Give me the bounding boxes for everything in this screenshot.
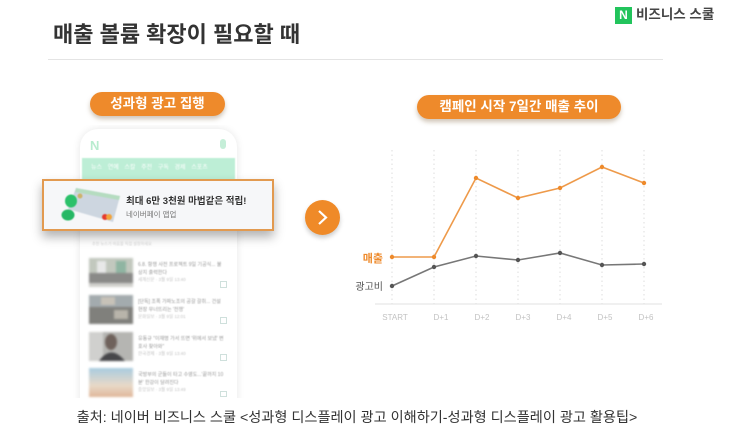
axis labels: START [382,313,408,322]
news item 3: 유동규 "이재명 가서 뜨면 '위에서 보냈' 변호사 찾아와" [138,336,224,350]
series: revenue [390,165,646,259]
axis labels: D+1 [434,313,449,322]
phone sub text: 추천 뉴스가 마음을 직접 설정하세요 [92,241,152,246]
icon: arrow circle [305,200,340,235]
microphone icon [220,139,226,149]
phone nav bar: 뉴스 연예 스칼 주전 구독 경제 스포츠 [91,165,208,171]
news list: 한국경제 · 3월 9일 13:40 [138,351,186,356]
axis labels: D+4 [557,313,572,322]
thumbnail 1 [88,257,134,288]
left heading pill: 성과형 광고 집행 [110,96,205,111]
axis labels: D+6 [639,313,654,322]
axis labels: D+5 [598,313,613,322]
title: 매출 볼륨 확장이 필요할 때 [53,22,300,47]
axis labels: D+2 [475,313,490,322]
banner subtext: 네이버페이 앱업 [126,210,176,219]
news item 1: 6.8. 항쟁 사전 프로젝트 9일 기공식... 불상지 출력한다 [138,262,221,276]
news list: 중앙일보 · 3월 9일 13:49 [138,387,186,392]
ad banner card [42,179,274,231]
phone nav bar [82,158,235,180]
news item 2: [단독] 조폭 가짜노조의 공갈 갈취... 건설현장 무너뜨리는 '전쟁' [138,299,221,313]
logo text: 비즈니스 스쿨 [636,7,714,22]
axis labels [382,313,654,322]
thumbnail 4 [89,368,133,397]
thumbnail 3 [88,330,134,363]
logo: Naver Business School [615,7,714,24]
icon: N logo: N [619,8,628,22]
source caption: 출처: 네이버 비즈니스 스쿨 <성과형 디스플레이 광고 이해하기-성과형 디스플레이 광고 활용팁> [77,410,637,426]
phone mockup [78,128,238,398]
left heading pill [90,92,225,116]
news list: 세계신문 · 3월 9일 13:40 [138,277,186,282]
series label: ad spend: 광고비 [355,281,383,293]
thumbnail 2 [88,294,134,326]
right heading pill [417,95,621,119]
icon: N logo [615,7,632,24]
news list: 문화일보 · 3월 9일 12:01 [138,314,186,319]
series label: revenue: 매출 [363,251,383,265]
phone logo: N [90,138,99,153]
right heading pill: 캠페인 시작 7일간 매출 추이 [439,99,599,114]
banner headline: 최대 6만 3천원 마법같은 적립! [126,196,246,207]
header divider [48,59,663,60]
line chart [355,150,662,322]
axis labels: D+3 [516,313,531,322]
series: ad spend [390,251,646,288]
news item 4: 국방부의 군들이 타고 수영도...'끝까지 10분' 한강이 달려진다 [138,372,223,386]
icon: credit card [60,188,120,222]
